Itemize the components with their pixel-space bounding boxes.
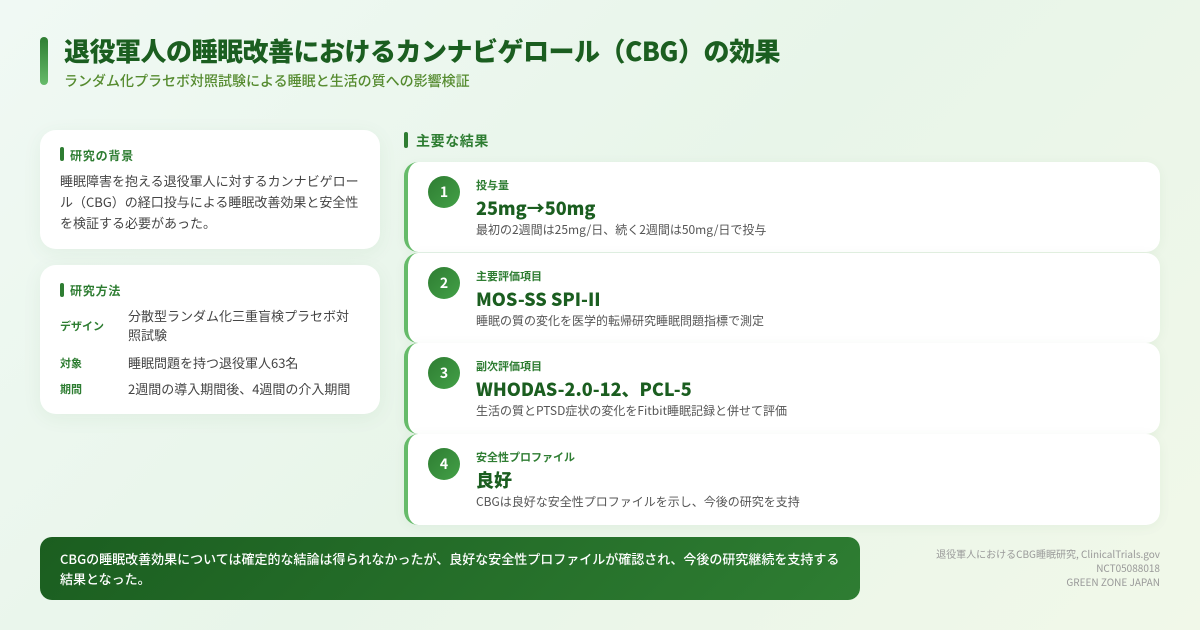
- label 4: 安全性プロファイル: [476, 449, 575, 465]
- badge 2: [428, 267, 460, 299]
- value 4: 良好: [476, 467, 512, 493]
- background text: [60, 171, 359, 232]
- badge 4: 4: [440, 454, 448, 474]
- methods heading marker: [60, 283, 64, 297]
- label: period: 期間: [60, 381, 82, 397]
- result card 2: [404, 253, 1160, 343]
- value 1: 25mg→50mg: [476, 195, 595, 221]
- title: 退役軍人の睡眠改善におけるカンナビゲロール（CBG）の効果: [64, 32, 780, 69]
- label: subjects: 対象: [60, 355, 82, 371]
- results heading marker: [404, 132, 408, 148]
- badge 2: 2: [440, 273, 448, 293]
- background heading marker: [60, 147, 64, 161]
- badge 4: [428, 448, 460, 480]
- conclusion callout: CBGの睡眠改善効果については確定的な結論は得られなかったが、良好な安全性プロファイルが確認され、今後の研究継続を支持する結果となった。: [60, 549, 839, 588]
- source footer: GREEN ZONE JAPAN: [1066, 574, 1160, 589]
- description 4: CBGは良好な安全性プロファイルを示し、今後の研究を支持: [476, 493, 800, 510]
- panel: methods: [40, 265, 380, 414]
- label 2: 主要評価項目: [476, 268, 542, 284]
- label 3: 副次評価項目: [476, 358, 542, 374]
- value: subjects: 睡眠問題を持つ退役軍人63名: [128, 353, 298, 372]
- result card 4: [404, 434, 1160, 525]
- subtitle: ランダム化プラセボ対照試験による睡眠と生活の質への影響検証: [64, 71, 470, 91]
- description 1: 最初の2週間は25mg/日、続く2週間は50mg/日で投与: [476, 221, 766, 238]
- value: period: 2週間の導入期間後、4週間の介入期間: [128, 379, 350, 398]
- results heading: 主要な結果: [416, 131, 489, 151]
- result card 1: [404, 162, 1160, 252]
- value 2: MOS-SS SPI-II: [476, 286, 601, 312]
- value: design: [128, 306, 349, 344]
- badge 1: 1: [440, 182, 448, 202]
- description 2: 睡眠の質の変化を医学的転帰研究睡眠問題指標で測定: [476, 312, 764, 329]
- source footer: [936, 546, 1160, 589]
- description 3: 生活の質とPTSD症状の変化をFitbit睡眠記録と併せて評価: [476, 402, 787, 419]
- conclusion callout: [40, 537, 860, 600]
- value: design: 照試験: [128, 325, 167, 344]
- title accent bar: [40, 37, 48, 85]
- badge 1: [428, 176, 460, 208]
- badge 3: 3: [440, 363, 448, 383]
- source footer: 退役軍人におけるCBG睡眠研究, ClinicalTrials.gov: [936, 546, 1160, 561]
- source footer: NCT05088018: [1096, 560, 1160, 575]
- methods heading: 研究方法: [70, 282, 121, 299]
- label 1: 投与量: [476, 177, 509, 193]
- badge 3: [428, 357, 460, 389]
- value 3: WHODAS-2.0-12、PCL-5: [476, 376, 692, 402]
- background heading: 研究の背景: [70, 147, 134, 164]
- value: design: 分散型ランダム化三重盲検プラセボ対: [128, 306, 349, 325]
- background text: を検証する必要があった。: [60, 213, 216, 232]
- background text: 睡眠障害を抱える退役軍人に対するカンナビゲロー: [60, 171, 359, 190]
- result card 3: [404, 343, 1160, 434]
- background text: ル（CBG）の経口投与による睡眠改善効果と安全性: [60, 192, 358, 211]
- panel: background: [40, 130, 380, 249]
- label: design: デザイン: [60, 318, 104, 334]
